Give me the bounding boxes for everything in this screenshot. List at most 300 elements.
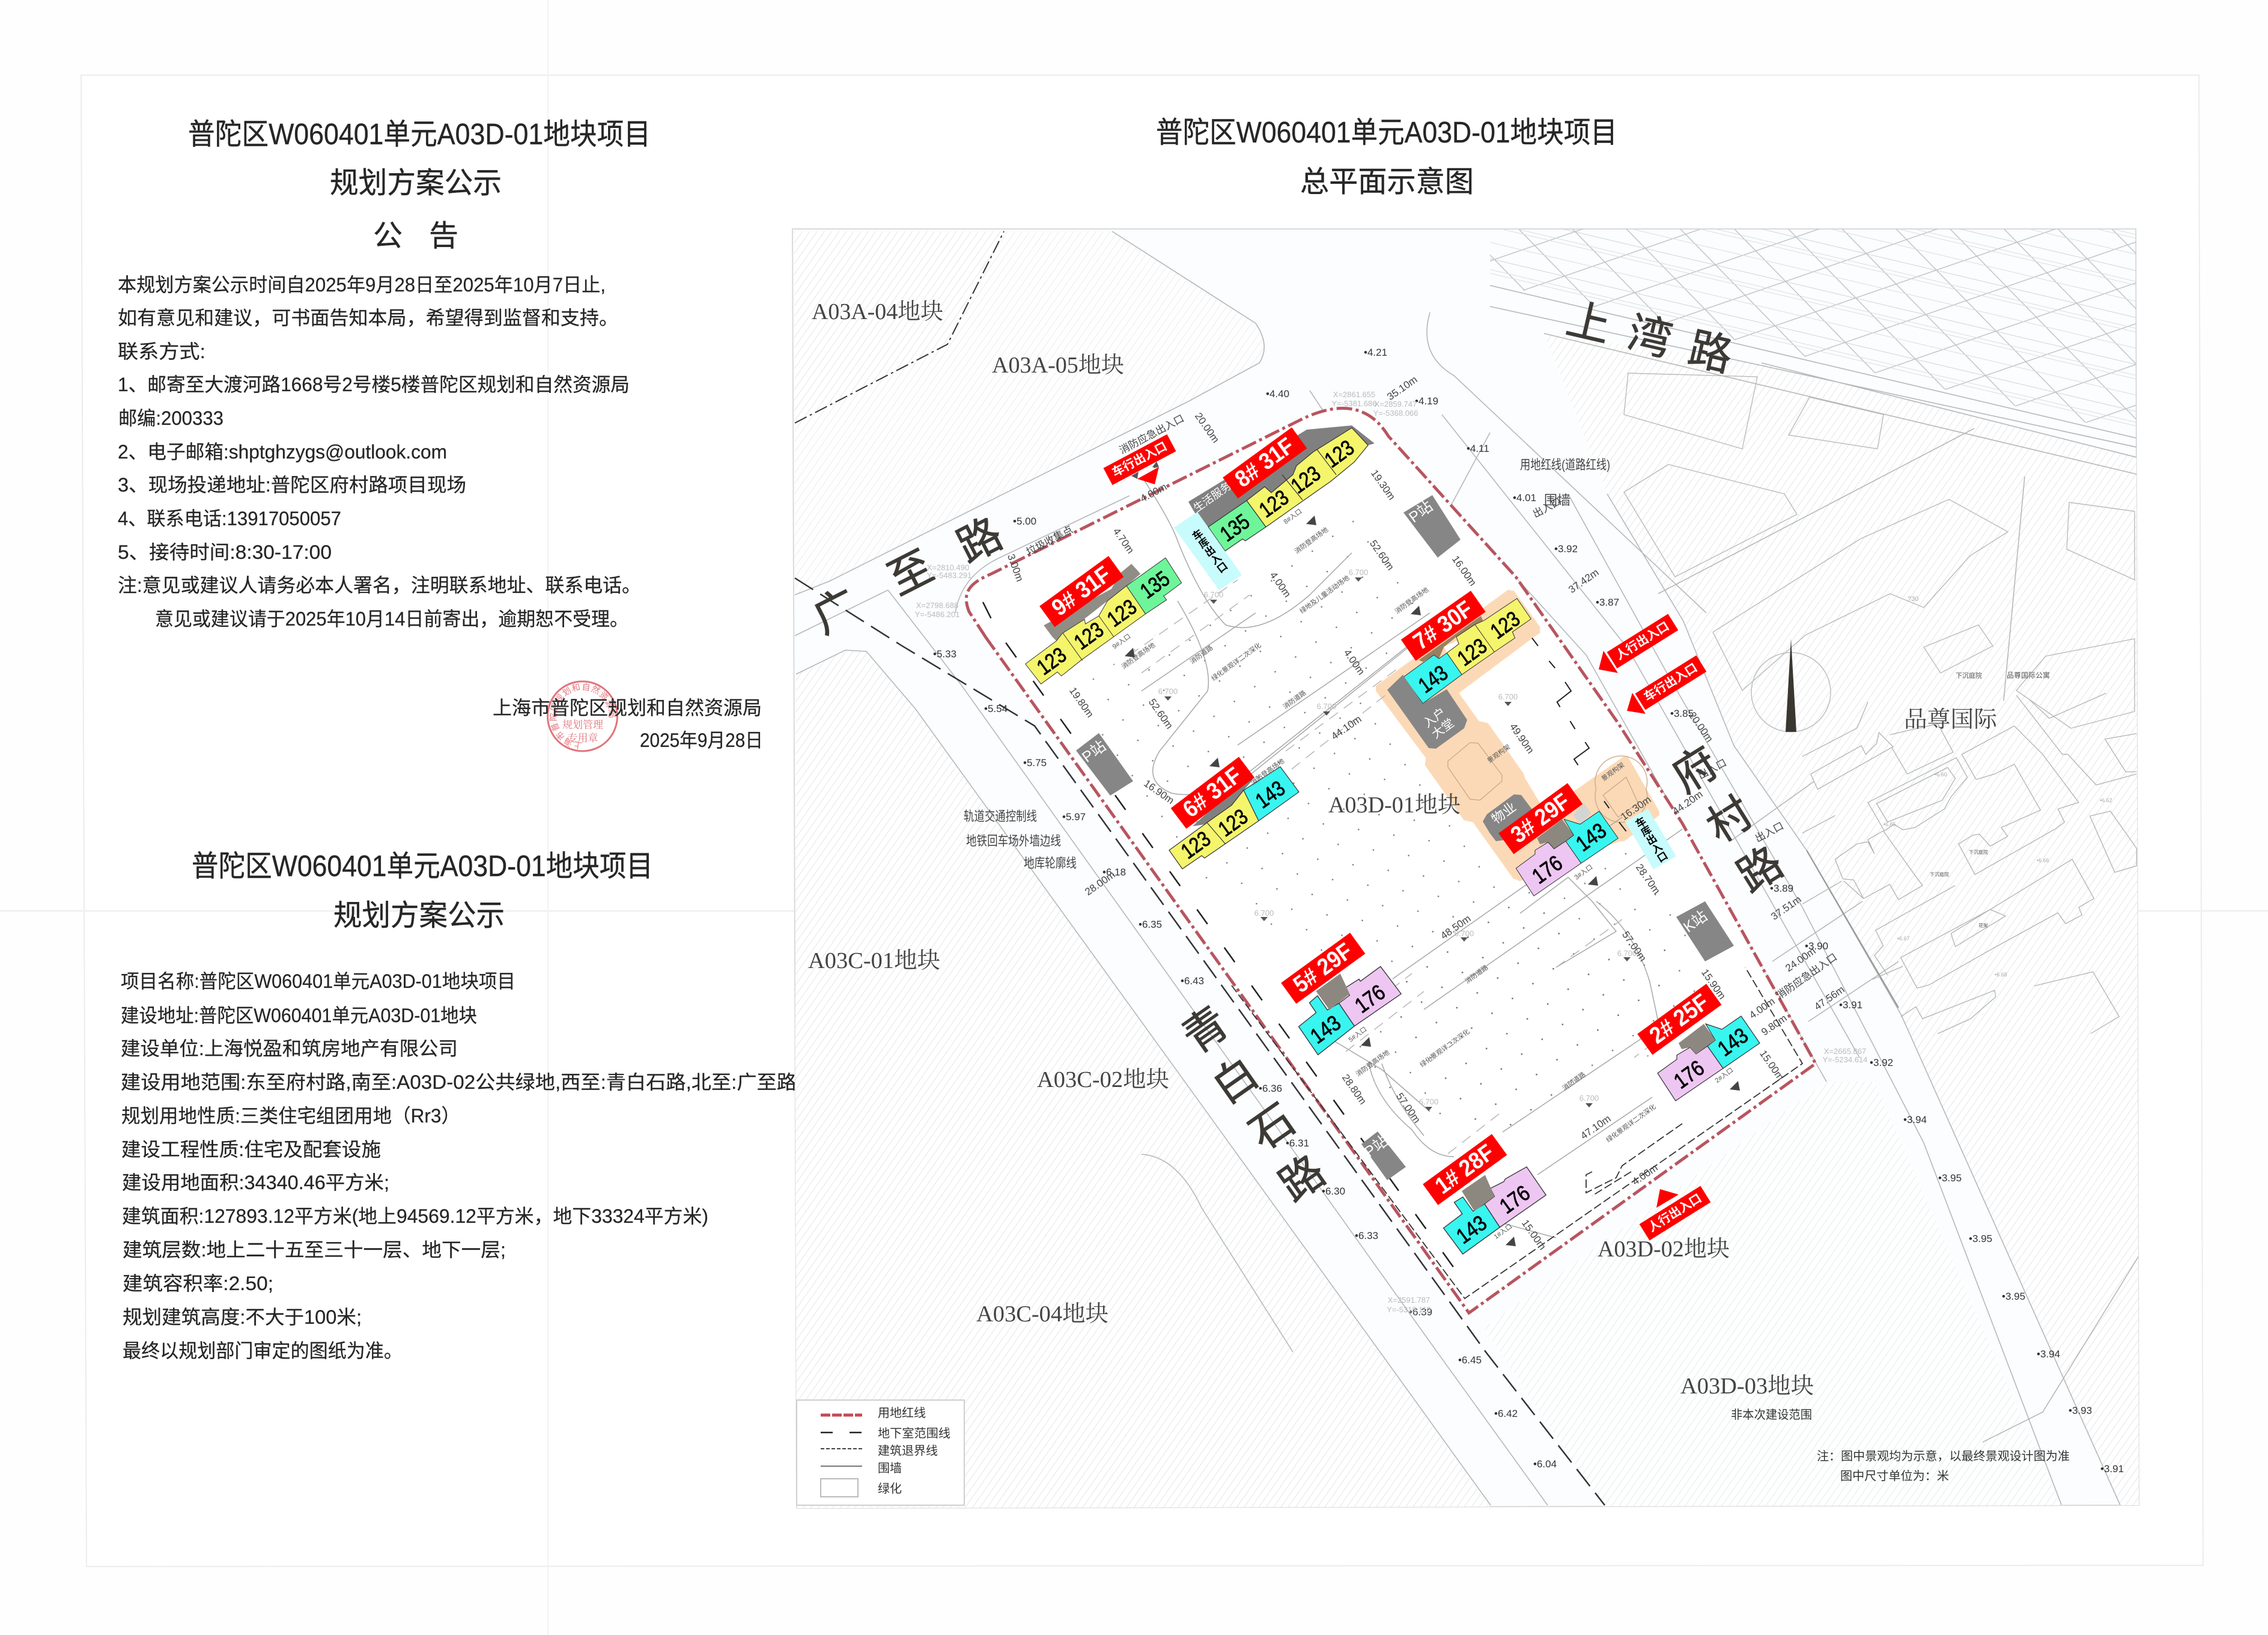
building: 7#: 123 — [1453, 633, 1491, 671]
internal annotations: 消防道路 — [1281, 689, 1307, 711]
building: 5#: 143 — [1306, 1010, 1345, 1049]
dimension labels: 52.60m — [1146, 696, 1175, 731]
text block: notice body: 注:意见或建议人请务必本人署名，注明联系地址、联系电话。 — [118, 574, 641, 596]
dimension labels: 4.00m — [1630, 1162, 1660, 1187]
building: 8#: 123 — [1286, 461, 1325, 498]
building: 5# — [1299, 966, 1401, 1055]
building: 3#: 176 — [1527, 850, 1567, 889]
note — [1817, 1449, 2070, 1483]
neighbouring annotations: •6.62 — [2100, 797, 2112, 803]
building: 7# — [1403, 598, 1531, 704]
legend — [797, 1400, 964, 1505]
internal annotations: 消防登高场地 — [1293, 525, 1330, 555]
line: setback south — [1232, 967, 1802, 1299]
neighbouring annotations: 品尊国际公寓 — [2007, 671, 2050, 680]
text block: notice body: 3、现场投递地址:普陀区府村路项目现场 — [118, 474, 466, 496]
garage entrance north: 车库出入口 — [1188, 527, 1229, 576]
dimension labels: 48.50m — [1438, 913, 1473, 942]
elevation points: •5.33 — [933, 648, 956, 660]
callouts — [964, 457, 1610, 871]
dimension labels: 16.90m — [1142, 778, 1176, 806]
text block: signature: 上海市普陀区规划和自然资源局 — [493, 697, 762, 719]
elevation markers 6.700 — [1158, 568, 1637, 1111]
legend: 用地红线 — [878, 1406, 926, 1420]
building: 1#: 143 — [1452, 1210, 1491, 1249]
garbage point and fire entrance labels: 消防应急出入口 — [1117, 413, 1186, 456]
callouts: 地库轮廓线 — [1024, 856, 1077, 871]
text block: project details: 建筑容积率:2.50; — [123, 1273, 273, 1294]
dimension labels: 4.00m — [1342, 647, 1367, 677]
dimension labels: 16.00m — [1450, 553, 1479, 588]
coordinates: Y=-5318.110 — [1387, 1305, 1431, 1314]
elevation points: •6.43 — [1181, 975, 1204, 987]
fire lane dashes — [1129, 580, 1682, 1154]
coordinates: X=2810.490 — [927, 563, 969, 572]
text block: project details: 建设用地范围:东至府村路,南至:A03D-02公共绿地,西至:青白石路,北至:广至路 — [121, 1071, 797, 1093]
panel: notice — [118, 118, 763, 752]
road names: 湾 — [1623, 309, 1676, 365]
coordinates: Y=-5381.686 — [1332, 399, 1376, 408]
legend: 地下室范围线 — [878, 1426, 950, 1440]
elevation points: •4.01 — [1513, 492, 1536, 504]
text block: project details: 规划建筑高度:不大于100米; — [123, 1306, 362, 1328]
road and block lines — [795, 231, 2139, 1505]
neighbouring annotations: 下沉庭院 — [1956, 671, 1982, 680]
internal annotations: 1#入口 — [1493, 1223, 1513, 1241]
elevation markers 6.700: 6.700 — [1204, 590, 1223, 599]
coordinates: X=2665.867 — [1824, 1047, 1866, 1056]
road names: 白 — [1205, 1049, 1267, 1113]
plot labels: A03C-02地块 — [1037, 1067, 1169, 1092]
entrance: vehicle east — [1627, 656, 1706, 714]
text block: project details: 建设工程性质:住宅及配套设施 — [121, 1139, 381, 1160]
internal annotations — [1111, 508, 1734, 1241]
neighbouring annotations: •6.67 — [1897, 936, 1910, 942]
dimension labels: 19.80m — [1067, 685, 1096, 720]
internal annotations: 9#入口 — [1111, 633, 1132, 651]
peach landscape area — [1376, 590, 1659, 881]
green dots — [1075, 505, 1676, 1142]
garbage point and fire entrance labels: 出入口 — [1531, 496, 1563, 520]
neighbouring annotations — [1883, 595, 2112, 978]
entrance: pedestrian east: 人行出入口 — [1613, 619, 1671, 663]
neighbouring annotations: ?30 — [1908, 595, 1918, 603]
heading: notice title: 公告 — [373, 220, 458, 252]
hatched surrounding plots — [794, 229, 2139, 1508]
elevation points: •5.75 — [1023, 757, 1047, 769]
callouts: 轨道交通控制线 — [964, 809, 1037, 824]
internal annotations: 消防登高场地 — [1249, 757, 1286, 787]
coordinates: X=2861.655 — [1333, 390, 1375, 399]
building: 9#: 135 — [1136, 566, 1174, 603]
dimension labels: 20.00m — [1686, 710, 1715, 744]
elevation points: •4.40 — [1266, 388, 1289, 400]
label: 6# 31F: 6# 31F — [1178, 763, 1247, 823]
text block: signature — [493, 697, 763, 751]
dimension labels: 3.00m — [1005, 553, 1026, 583]
heading: site plan title — [1156, 117, 1617, 198]
neighbouring building outlines: 品尊国际 — [1802, 693, 2136, 1034]
plot labels: A03D-02地块 — [1598, 1237, 1730, 1262]
elevation points — [933, 347, 2124, 1475]
elevation points: •3.94 — [1903, 1114, 1927, 1125]
garbage point and fire entrance labels — [1024, 413, 1839, 1002]
callouts: 围墙 — [1544, 493, 1570, 508]
coordinates: Y=-5486.201 — [915, 610, 959, 619]
internal annotations: 8#入口 — [1283, 508, 1303, 526]
dimension labels: 15.90m — [1699, 967, 1728, 1002]
dimension labels: 37.42m — [1566, 567, 1601, 595]
coordinates — [915, 390, 1867, 1314]
dimension labels: 57.00m — [1620, 929, 1649, 964]
elevation points: •6.39 — [1409, 1306, 1432, 1318]
coordinates: Y=-5483.291 — [927, 571, 971, 580]
internal annotations: 消防道路 — [1560, 1070, 1587, 1092]
elevation markers 6.700: 6.700 — [1158, 687, 1178, 696]
plot labels: A03A-05地块 — [992, 353, 1124, 378]
plot labels: 非本次建设范围 — [1731, 1408, 1812, 1422]
dimension labels: 47.10m — [1578, 1113, 1613, 1142]
building: 2#: 176 — [1669, 1055, 1709, 1094]
building: 8# — [1188, 425, 1375, 551]
elevation points: •5.97 — [1062, 811, 1086, 823]
building: 6# — [1169, 767, 1299, 869]
dimension labels: 35.10m — [1385, 374, 1420, 403]
elevation markers 6.700: 6.700 — [1455, 929, 1474, 938]
road names: 至 — [881, 542, 941, 604]
coordinates: X=2591.787 — [1388, 1296, 1430, 1305]
lobby — [1387, 675, 1467, 749]
property management room: 物业 — [1489, 799, 1519, 827]
building: 6#: 123 — [1214, 804, 1252, 841]
entrance: vehicle east: 车行出入口 — [1641, 660, 1700, 704]
heading: project information title: 规划方案公示 — [333, 900, 505, 932]
elevation markers 6.700: 6.700 — [1498, 692, 1518, 701]
dimension labels: 44.10m — [1329, 713, 1364, 742]
legend: 建筑退界线 — [878, 1444, 938, 1458]
elevation points: •3.94 — [2037, 1348, 2060, 1360]
heading: site plan title: 总平面示意图 — [1300, 166, 1474, 198]
road names: 广 — [806, 580, 866, 643]
callouts: 地铁回车场外墙边线 — [966, 833, 1061, 848]
building: 2#: 143 — [1713, 1023, 1753, 1061]
dimension labels: 52.60m — [1367, 538, 1396, 573]
coordinates: X=2859.747 — [1375, 400, 1417, 409]
neighbouring annotations: •6.68 — [1995, 972, 2007, 978]
text block: notice body — [118, 274, 641, 630]
elevation points: •3.92 — [1554, 543, 1578, 555]
entrance: pedestrian east — [1599, 614, 1678, 673]
line: metro control line — [795, 578, 1605, 1505]
building: 3#: 143 — [1571, 818, 1611, 856]
garbage point and fire entrance labels: 出入口 — [1696, 757, 1728, 781]
garage entrance north — [1174, 512, 1242, 590]
text block: notice body: 4、联系电话:13917050057 — [118, 508, 341, 529]
building: 9#: 123 — [1032, 642, 1071, 680]
text block: project details: 最终以规划部门审定的图纸为准。 — [123, 1340, 403, 1362]
dimension labels: 57.00m — [1394, 1091, 1423, 1125]
text block: notice body: 1、邮寄至大渡河路1668号2号楼5楼普陀区规划和自然资源局 — [118, 374, 630, 395]
garage entrance east — [1625, 809, 1676, 869]
text block: notice body: 如有意见和建议，可书面告知本局，希望得到监督和支持。 — [118, 307, 618, 329]
road names: 青 — [1175, 999, 1237, 1062]
internal roads — [1142, 481, 1682, 1238]
coordinates: X=2798.688 — [916, 601, 958, 610]
building: 5#: 176 — [1350, 979, 1390, 1018]
text: 生活服务: 生活服务 — [1191, 480, 1233, 514]
plot labels: A03D-03地块 — [1680, 1374, 1814, 1399]
text block: notice body: 本规划方案公示时间自2025年9月28日至2025年10月7日止, — [118, 274, 606, 296]
internal annotations: 消防道路 — [1463, 963, 1489, 985]
text block: notice body: 联系方式: — [118, 341, 205, 362]
elevation points: •3.89 — [1770, 883, 1793, 894]
label: 2# 25F: 2# 25F — [1645, 989, 1713, 1049]
text block: project details: 项目名称:普陀区W060401单元A03D-01地块项目 — [121, 970, 515, 992]
text block: project details: 建设单位:上海悦盈和筑房地产有限公司 — [121, 1038, 458, 1059]
elevation points: •6.45 — [1458, 1354, 1482, 1366]
road names: 路 — [950, 510, 1010, 572]
text block: project details: 规划用地性质:三类住宅组团用地（Rr3） — [121, 1105, 460, 1127]
dimension labels: 19.30m — [1369, 467, 1397, 502]
building: 6#: 143 — [1251, 776, 1289, 813]
station: P站 northeast — [1403, 495, 1461, 558]
text block: project details: 建筑层数:地上二十五至三十一层、地下一层; — [123, 1239, 506, 1261]
internal annotations: 景观构架 — [1485, 743, 1512, 765]
garbage point and fire entrance labels: 垃圾收集点 — [1024, 524, 1075, 558]
text block: notice body: 2、电子邮箱:shptghzygs@outlook.com — [118, 441, 447, 463]
road names: 路 — [1271, 1147, 1334, 1211]
building: 8#: 123 — [1254, 485, 1293, 522]
neighbouring building outlines north — [1624, 373, 2135, 728]
neighbouring annotations: •6.60 — [1935, 772, 1947, 778]
internal annotations: 3#入口 — [1573, 863, 1594, 881]
building: 9#: 123 — [1102, 594, 1141, 632]
neighbouring annotations: •6.65 — [1883, 821, 1896, 827]
lobby: 入户 — [1421, 705, 1449, 731]
neighbouring annotations: •6.66 — [2037, 857, 2049, 863]
elevation markers 6.700: 6.700 — [1317, 702, 1336, 711]
icon: official seal: 上海市普陀区规划和自然资源局 — [549, 683, 616, 749]
internal annotations: 绿地及儿童活动场地 — [1298, 573, 1351, 615]
text block: notice body: 5、接待时间:8:30-17:00 — [118, 541, 332, 563]
note: 注：图中景观均为示意，以最终景观设计图为准 — [1817, 1449, 2070, 1463]
elevation points: •6.04 — [1533, 1458, 1557, 1470]
dimension labels: 37.51m — [1769, 894, 1804, 922]
elevation points: •3.95 — [1938, 1172, 1962, 1184]
property management room — [1483, 794, 1532, 841]
line: basement outline — [983, 602, 1454, 1268]
road names: 路 — [1684, 324, 1737, 381]
line: basement outline east — [1532, 638, 1626, 831]
internal annotations: 消防登高场地 — [1354, 1048, 1391, 1078]
internal annotations: 消防登高场地 — [1120, 641, 1157, 671]
elevation points: •6.30 — [1322, 1186, 1345, 1197]
text block: notice body: 意见或建议请于2025年10月14日前寄出，逾期恕不受理。 — [155, 608, 628, 630]
station: P站 south: P站 — [1361, 1132, 1391, 1161]
heading: project information title — [192, 850, 653, 932]
lobby: 大堂 — [1429, 716, 1457, 741]
road names: 上 — [1562, 295, 1615, 352]
elevation points: •6.42 — [1494, 1408, 1518, 1419]
icon: official seal: 规划管理 — [562, 719, 603, 731]
panel: project information — [121, 850, 797, 1362]
plot boundary dashed line — [795, 231, 1004, 423]
plot labels: 品尊国际 — [1904, 707, 1998, 732]
station: P站 northeast: P站 — [1406, 498, 1436, 526]
elevation points: •3.90 — [1805, 940, 1828, 952]
dimension labels: 20.00m — [1193, 410, 1221, 445]
text block: project details: 建设地址:普陀区W060401单元A03D-01地块 — [121, 1005, 477, 1026]
internal annotations: 绿化景观详二次深化 — [1418, 1027, 1471, 1069]
plot labels: A03A-04地块 — [812, 299, 943, 324]
dimension labels: 28.80m — [1340, 1072, 1369, 1107]
dimension labels: 28.00m — [1083, 869, 1117, 898]
text block: signature: 2025年9月28日 — [640, 729, 763, 751]
dimension labels: 4.00m — [1268, 570, 1293, 600]
label: 7# 30F: 7# 30F — [1409, 596, 1477, 655]
elevation points: •6.33 — [1355, 1230, 1378, 1241]
elevation points: •5.00 — [1013, 516, 1036, 527]
dimension labels: 44.20m — [1670, 788, 1705, 817]
label: 3# 29F: 3# 29F — [1506, 788, 1575, 848]
elevation markers 6.700: 6.700 — [1617, 949, 1637, 958]
dimension labels: 16.30m — [1619, 794, 1653, 823]
road names: 石 — [1241, 1095, 1304, 1159]
entrance: vehicle north: 车行出入口 — [1110, 439, 1169, 480]
dimension labels: 15.00m — [1757, 1048, 1786, 1083]
site interior — [966, 408, 1816, 1313]
dimension labels: 47.56m — [1812, 984, 1847, 1012]
garbage point and fire entrance labels: 消防应急出入口 — [1774, 951, 1839, 1002]
elevation points: •6.31 — [1286, 1137, 1309, 1149]
elevation points: •3.91 — [1839, 999, 1862, 1011]
internal annotations: 消防登高场地 — [1393, 585, 1430, 615]
building: 3# — [1516, 803, 1618, 896]
plot labels: A03C-01地块 — [808, 948, 940, 973]
dimension labels: 4.00m — [1747, 996, 1777, 1021]
garbage point and fire entrance labels: 出入口 — [1753, 820, 1786, 844]
building: 2# — [1658, 1016, 1760, 1101]
coordinates: Y=-5234.614 — [1823, 1055, 1867, 1064]
entrance: pedestrian south — [1640, 1186, 1710, 1240]
text block: project details — [121, 970, 797, 1362]
text block: notice body: 邮编:200333 — [118, 407, 223, 429]
text block: project details: 建设用地面积:34340.46平方米; — [122, 1172, 389, 1193]
dimension labels: 4.00m — [1139, 481, 1169, 504]
elevation points: •4.21 — [1364, 347, 1387, 358]
plot labels: A03C-04地块 — [976, 1302, 1108, 1327]
entrance markers — [1125, 516, 1740, 1246]
label: 9# 31F: 9# 31F — [1047, 561, 1116, 621]
internal annotations: 2#入口 — [1714, 1067, 1734, 1085]
road names: 村 — [1698, 788, 1761, 852]
internal annotations: 景观构架 — [1599, 761, 1626, 783]
elevation points: •3.85 — [1670, 708, 1694, 719]
dimension labels: 28.70m — [1634, 862, 1662, 897]
heading: notice title: 普陀区W060401单元A03D-01地块项目 — [188, 118, 651, 151]
neighbouring annotations: 下沉庭院 — [1930, 871, 1949, 877]
dimension labels: 9.80m — [1759, 1012, 1789, 1038]
callouts: 用地红线(道路红线) — [1520, 457, 1610, 472]
elevation points: •3.91 — [2100, 1463, 2124, 1475]
heading: project information title: 普陀区W060401单元A03D-01地块项目 — [192, 850, 653, 883]
building: 7#: 123 — [1486, 606, 1524, 644]
heading: notice title: 规划方案公示 — [330, 167, 502, 199]
compass — [1751, 639, 1831, 732]
elevation points: •5.54 — [984, 703, 1008, 714]
dimension labels — [1005, 374, 1847, 1252]
building: 8#: 123 — [1320, 435, 1358, 472]
line: land boundary red line — [966, 408, 1816, 1313]
elevation markers 6.700: 6.700 — [1419, 1097, 1438, 1106]
station: K站 — [1676, 901, 1734, 961]
neighbouring annotations: 下沉庭院 — [1969, 849, 1988, 855]
internal annotations: 绿化景观详二次深化 — [1604, 1102, 1658, 1144]
coordinates: Y=-5368.066 — [1373, 409, 1418, 418]
internal annotations: 绿化景观详二次深化 — [1209, 641, 1263, 683]
label: 1# 28F: 1# 28F — [1430, 1139, 1499, 1199]
elevation points: •6.18 — [1102, 866, 1126, 878]
station: P站 west: P站 — [1079, 737, 1109, 766]
plot labels: A03D-01地块 — [1328, 793, 1461, 818]
plot labels — [808, 299, 1998, 1422]
building: 1# — [1444, 1167, 1546, 1254]
building: 9# — [1026, 558, 1182, 684]
elevation points: •3.93 — [2069, 1405, 2092, 1416]
building: 1#: 176 — [1495, 1180, 1534, 1219]
heading: notice title — [188, 118, 651, 252]
panel: site plan map — [792, 229, 2139, 1508]
road names: 路 — [1729, 838, 1792, 902]
elevation points: •3.95 — [2002, 1291, 2025, 1302]
building: 6#: 123 — [1176, 826, 1215, 863]
elevation points: •3.92 — [1870, 1057, 1893, 1068]
station: P站 south — [1361, 1131, 1406, 1180]
legend: 围墙 — [878, 1461, 902, 1475]
dimension labels: 24.00m — [1783, 945, 1818, 974]
entrance: pedestrian south: 人行出入口 — [1646, 1191, 1704, 1235]
legend: 绿化 — [878, 1482, 902, 1496]
building: 8#: 135 — [1215, 509, 1254, 546]
elevation markers 6.700: 6.700 — [1254, 909, 1274, 918]
internal annotations: 消防道路 — [1188, 644, 1214, 666]
elevation markers 6.700: 6.700 — [1579, 1094, 1599, 1103]
station: P站 west — [1076, 733, 1133, 796]
neighbouring annotations: 花架 — [1978, 922, 1988, 928]
elevation points: •3.95 — [1969, 1233, 1992, 1244]
station: K站: K站 — [1680, 907, 1710, 936]
heading: site plan title: 普陀区W060401单元A03D-01地块项目 — [1156, 117, 1617, 149]
dimension labels: 49.90m — [1507, 721, 1536, 756]
garage entrance east: 车库出入口 — [1632, 815, 1669, 865]
label: 8# 31F: 8# 31F — [1230, 433, 1299, 493]
dimension labels: 4.70m — [1111, 526, 1136, 556]
elevation points: •6.35 — [1139, 919, 1162, 930]
note: 图中尺寸单位为：米 — [1840, 1469, 1949, 1483]
text block: project details: 建筑面积:127893.12平方米(地上94569.12平方米，地下33324平方米) — [122, 1205, 708, 1227]
elevation points: •3.87 — [1596, 597, 1619, 608]
building: 9#: 123 — [1069, 617, 1108, 654]
dimension labels: 15.00m — [1519, 1217, 1548, 1252]
road names — [806, 295, 1792, 1211]
icon: official seal: 专用章 — [567, 732, 598, 744]
elevation markers 6.700: 6.700 — [1349, 568, 1368, 577]
building: 7#: 143 — [1414, 660, 1452, 698]
elevation points: •6.36 — [1259, 1083, 1282, 1094]
internal annotations: 5#入口 — [1348, 1026, 1368, 1044]
entrance: vehicle north — [1104, 434, 1176, 485]
elevation points: •4.11 — [1467, 443, 1489, 454]
